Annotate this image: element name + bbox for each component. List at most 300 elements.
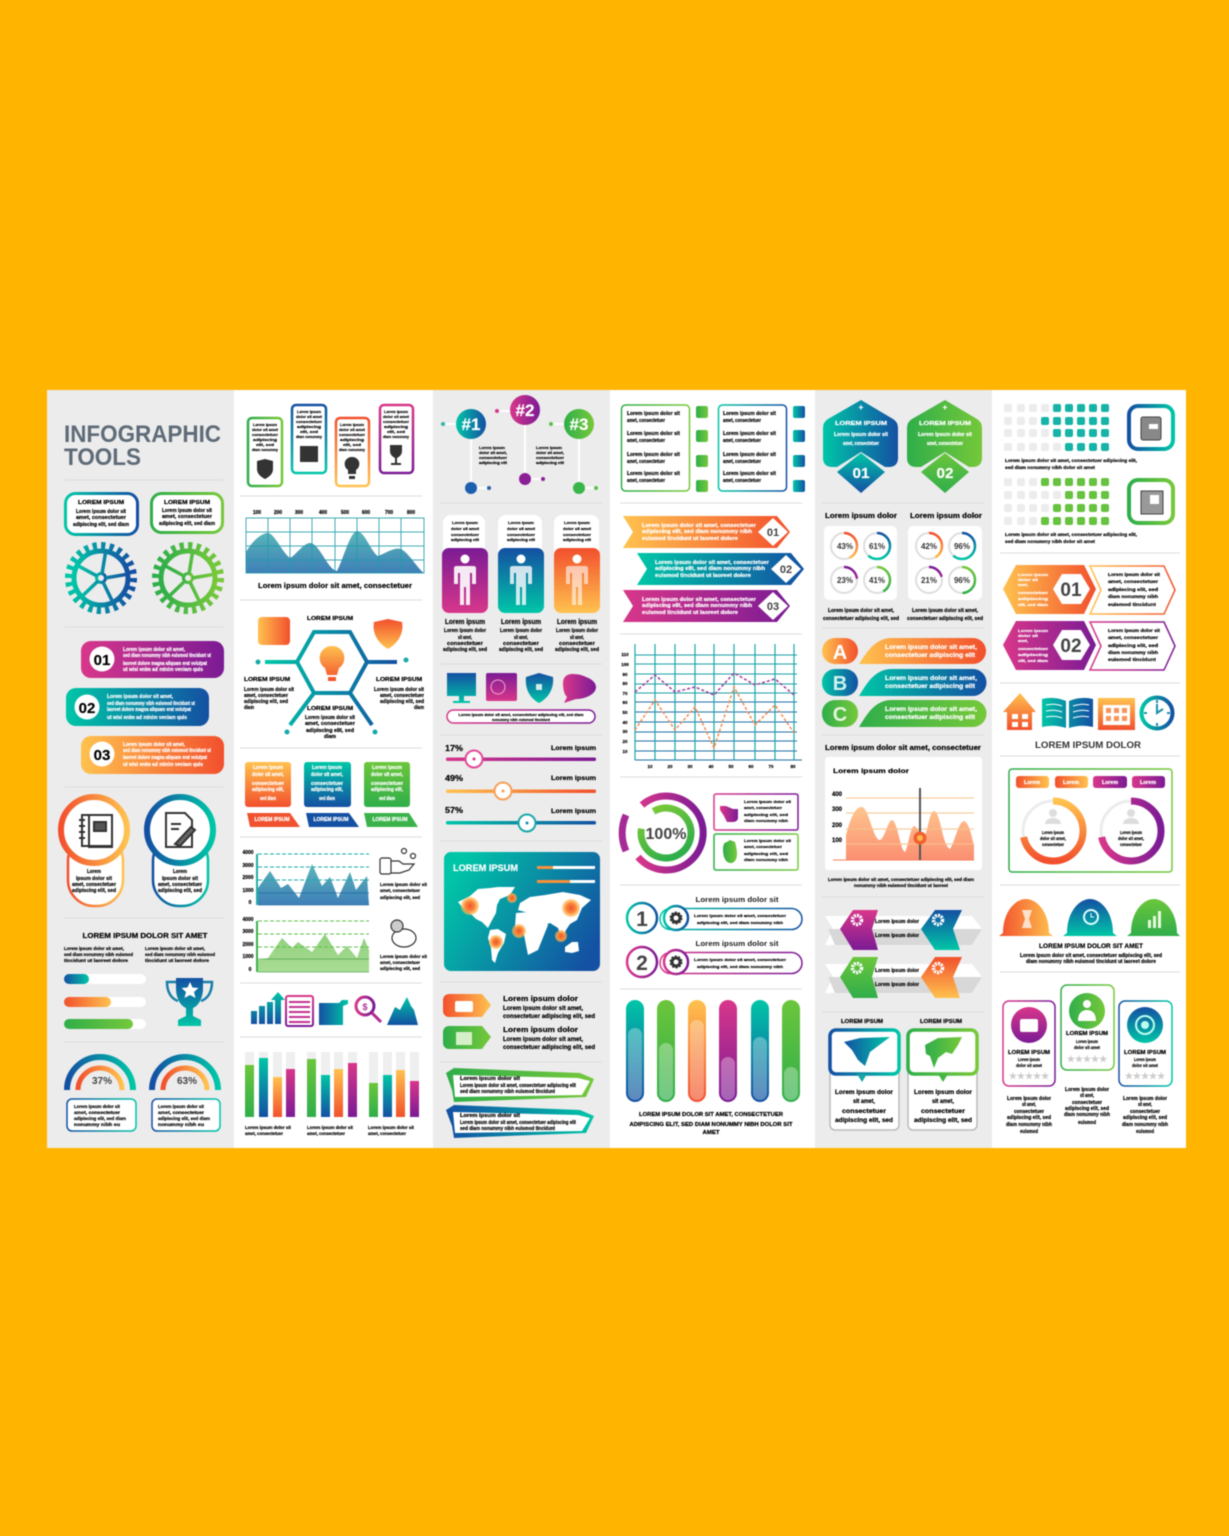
icon row: house, book, calendar, clock (1003, 693, 1172, 750)
blue area chart (242, 850, 369, 906)
dome icons: Lorem ipsum dolor sit amet, consectetuer adipiscing elit, sed (1020, 953, 1162, 959)
note cards (248, 405, 413, 486)
ribbon row two (825, 957, 982, 998)
ranking timeline: #1 (462, 415, 480, 434)
step pill 01: 01 (94, 652, 110, 669)
map pin card: Eurasia (908, 1019, 977, 1130)
tube chart caption: ADIPISCING ELIT, SED DIAM NONUMMY NIBH DOLOR SIT (630, 1122, 792, 1128)
callout boxes with hand icons: diam nonummy nibh (744, 818, 789, 823)
blue area chart: 4000 (242, 850, 254, 856)
profile card blue: dolor sit amet (1132, 1063, 1158, 1068)
hex step 02: amet, (1018, 638, 1028, 643)
profile card purple: LOREM IPSUM (1008, 1050, 1050, 1056)
step pill 01: sed diam nonummy nibh euismod tincidunt ut (123, 653, 211, 659)
hexagon diagram: Lorem ipsum dolor sit (305, 715, 355, 721)
orange area chart card: 200 (832, 823, 843, 829)
sliders: 17% (445, 744, 463, 753)
percent ring cards: Lorem ipsum dolor sit amet, (828, 608, 895, 614)
arrow banner 02: 02 (780, 564, 792, 576)
tube chart caption: LOREM IPSUM DOLOR SIT AMET, CONSECTETUER (639, 1112, 783, 1118)
line chart (621, 644, 802, 769)
icon: trophy (167, 978, 212, 1026)
percent ring cards: 43% (837, 542, 853, 551)
people cards: dolor sit amet (507, 526, 536, 531)
numbered step 1: 1 (636, 908, 648, 931)
hexagon badge 01: LOREM IPSUM (835, 421, 887, 427)
percent ring cards: Lorem ipsum dolor (825, 513, 897, 520)
hexagon diagram: Lorem ipsum dolor sit (374, 687, 424, 693)
ranking timeline: #2 (516, 401, 534, 420)
icon: blue framed window (1129, 406, 1173, 449)
numbered step 1: adipiscing elit, sed diam nonummy nibh (697, 920, 784, 925)
hex step 01: amet, (1018, 582, 1028, 587)
banner: green: Lorem ipsum dolor sit amet, consectetuer adipiscing elit (460, 1083, 576, 1089)
hexagon badge 02: Lorem ipsum dolor sit (918, 432, 972, 438)
numbered step 1: Lorem ipsum dolor sit amet, consectetuer (694, 913, 787, 918)
profile card purple: Lorem ipsum (1018, 1057, 1040, 1062)
profile notes: diam nonummy nibh (1064, 1112, 1110, 1118)
people cards (442, 515, 600, 653)
coloured text cards with tabs: Lorem ipsum (253, 765, 284, 771)
text box: green: Lorem ipsum dolor sit (162, 508, 212, 514)
coloured text cards with tabs: LOREM IPSUM (372, 817, 408, 823)
coloured text cards with tabs: LOREM IPSUM (314, 817, 348, 823)
area chart with grid: 600 (362, 510, 370, 516)
step pill 03 (81, 736, 224, 774)
profile notes: sit amet, (1080, 1093, 1094, 1099)
percent ring cards: 96% (954, 576, 970, 585)
area chart with grid: 500 (341, 510, 349, 516)
chart notes: amet, consectetuer (380, 960, 420, 965)
world map card: LOREM IPSUM (453, 863, 518, 873)
badge: document: adipiscing elit, sed (158, 888, 202, 894)
banner: green: Lorem ipsum dolor sit (460, 1076, 520, 1082)
ribbon row one: Lorem ipsum dolor (875, 933, 919, 939)
gauge caption boxes: amet, consectetuer (74, 1110, 120, 1115)
hexagon diagram: adipiscing elit, sed (306, 728, 354, 734)
heading and intro text: tincidunt ut laoreet dolore (145, 958, 210, 963)
text list: teal: amet, consectetuer (723, 438, 761, 444)
banner: blue: sed diam nonummy nibh euismod tincidunt (460, 1126, 555, 1132)
map pin card: North America: adipiscing elit, sed (835, 1118, 893, 1124)
line chart: 30 (687, 764, 693, 769)
gauge 37%: 37% (92, 1076, 112, 1087)
people cards: Lorem ipsum (564, 520, 590, 525)
chart notes: adipiscing elit, sed (380, 895, 420, 900)
gauge caption boxes: Lorem ipsum dolor sit (74, 1104, 120, 1109)
icon row with caption pill: nonummy nibh euismod tincidunt (492, 717, 551, 722)
donut panel: Lorem (1024, 780, 1041, 786)
people cards: Lorem ipsum (445, 619, 485, 626)
gauge 37% (67, 1057, 133, 1090)
line chart: 110 (621, 652, 629, 657)
hexagon diagram: adipiscing elit, sed (244, 699, 288, 705)
chart notes (380, 882, 427, 971)
gauge 63% (152, 1057, 218, 1090)
note cards: dolor sit amet (252, 427, 279, 432)
hex step 01: euismod tincidunt (1108, 602, 1157, 607)
callout boxes with hand icons: diam nonummy nibh (744, 857, 789, 862)
tag with text: green: consectetuer adipiscing elit, sed (503, 1045, 595, 1051)
profile card green (1061, 985, 1114, 1070)
percent ring cards: 42% (921, 542, 937, 551)
profile card purple: ★★★★★ (1009, 1071, 1050, 1081)
note cards: elit, sed (300, 429, 319, 434)
sliders: 49% (445, 774, 463, 783)
icon: orange safe (258, 617, 290, 645)
hexagon badge 01: Lorem ipsum dolor sit (834, 432, 888, 438)
arrow banner 03: euismod tincidunt ut laoreet dolore (642, 610, 738, 616)
hexagon diagram (244, 616, 424, 740)
note cards: Lorem ipsum (340, 422, 364, 427)
badge: notebook: amet, consectetuer (72, 882, 116, 888)
arrow banner 02 (637, 553, 804, 585)
badge: document: ipsum dolor sit (162, 876, 198, 882)
banner: blue: Lorem ipsum dolor sit (460, 1113, 520, 1119)
arrow banner 01 (623, 516, 790, 548)
line chart: 90 (622, 672, 628, 677)
step pill 03: 03 (94, 747, 110, 764)
profile card green: ★★★★★ (1067, 1054, 1108, 1064)
orange area chart card: 300 (832, 807, 843, 813)
text list: teal: Lorem ipsum dolor sit (723, 471, 776, 477)
note cards: diam nonummy (339, 447, 366, 452)
note cards: consectetuer (296, 419, 322, 424)
hex step 02: consectetuer (1018, 646, 1049, 651)
donut 100%: 100% (646, 826, 686, 843)
line chart: 80 (790, 764, 796, 769)
icon: green framed document (1129, 480, 1173, 523)
hexagon badge 02: + (943, 403, 948, 412)
coloured text cards with tabs: adipiscing elit, (311, 787, 344, 793)
numbered step 1: Lorem ipsum dolor sit (696, 895, 779, 904)
icon: person placeholder right (1123, 809, 1139, 824)
line chart: 50 (622, 710, 628, 715)
line chart: 20 (667, 764, 673, 769)
people cards: sit amet, (570, 635, 584, 641)
dot matrix two: Lorem ipsum dolor sit amet, consectetuer adipiscing elit, (1005, 532, 1137, 537)
option B: B (833, 673, 847, 695)
arrow banner 03: adipiscing elit, sed diam nonummy nibh (642, 603, 752, 609)
numbered step 2: Lorem ipsum dolor sit amet, consectetuer (694, 957, 787, 962)
hex step 01 (1003, 565, 1175, 614)
gauge caption boxes: nonummy nibh eu (158, 1122, 204, 1127)
gauge caption boxes (67, 1099, 220, 1131)
world map card (444, 852, 600, 971)
panel: column one (61, 421, 224, 1131)
badge: notebook: ipsum dolor sit (76, 876, 112, 882)
hexagon diagram: LOREM IPSUM (376, 677, 422, 683)
note cards: adipiscing (253, 437, 278, 442)
heading and intro text: LOREM IPSUM DOLOR SIT AMET (82, 933, 208, 940)
people cards: Lorem ipsum dolor (500, 628, 542, 634)
people cards: dolor sit amet (451, 526, 480, 531)
step pill 03: Lorem ipsum dolor sit amet, (123, 742, 186, 748)
badge: notebook (61, 797, 127, 906)
dot matrix two: sed diam nonummy nibh dolor sit amet (1005, 539, 1096, 544)
option C: C (833, 704, 847, 726)
text box: blue: Lorem ipsum dolor sit (76, 509, 126, 515)
option B: consectetuer adipiscing elit (885, 684, 975, 690)
dot matrix two (1004, 478, 1137, 544)
text box: blue (66, 494, 138, 534)
step pill 01: Lorem ipsum dolor sit amet, (123, 647, 186, 653)
gauge caption boxes: nonummy nibh eu (74, 1122, 120, 1127)
icon: person placeholder left (1045, 809, 1061, 824)
hexagon badge 01 (823, 400, 898, 493)
percent ring cards: 96% (954, 542, 970, 551)
text box: green: adipiscing elit, sed diam (159, 521, 216, 527)
orange area chart card: Lorem ipsum dolor sit amet, consectetuer adipiscing elit, sed diam (828, 877, 974, 882)
donut panel: dolor sit amet, (1118, 836, 1144, 841)
hex step 01: Lorem ipsum (1018, 572, 1049, 577)
map pin card: Eurasia: sit amet, (932, 1099, 954, 1105)
area chart with grid: 300 (295, 510, 303, 516)
sliders: Lorem ipsum (551, 776, 596, 782)
coloured text cards with tabs: sed diam (319, 796, 335, 802)
text box: green: LOREM IPSUM (164, 500, 210, 506)
coloured text cards with tabs: dolor sit amet, (311, 772, 344, 778)
icon: bulb (345, 457, 359, 479)
icon: pointing hand (720, 806, 738, 822)
numbered step 2: 2 (636, 952, 648, 975)
people cards: sit amet, (514, 635, 528, 641)
text list: green: Lorem ipsum dolor sit (627, 431, 680, 437)
line chart: 80 (622, 681, 628, 686)
hexagon badge 02 (907, 400, 982, 493)
line chart: 40 (622, 720, 628, 725)
note cards: dolor sit amet (296, 414, 323, 419)
note cards: diam nonummy (252, 447, 279, 452)
callout boxes with hand icons: Lorem ipsum dolor sit (744, 838, 792, 843)
people cards: adipiscing elit, sed (499, 647, 543, 653)
heading and intro text: Lorem ipsum dolor sit amet, (64, 946, 124, 951)
callout boxes with hand icons: adipiscing elit, sed (744, 851, 789, 856)
percent ring cards: consectetuer adipiscing elit, sed (823, 616, 899, 622)
chart notes: Lorem ipsum dolor sit (380, 882, 427, 887)
profile notes: diam nonummy nibh (1006, 1122, 1052, 1128)
percent ring cards: Lorem ipsum dolor (910, 513, 982, 520)
hexagon diagram: amet, consectetuer (305, 721, 355, 727)
option A (822, 638, 986, 664)
note cards: consectetuer (339, 432, 365, 437)
donut panel: Lorem (1102, 780, 1119, 786)
profile notes: Lorem ipsum dolor (1123, 1096, 1167, 1102)
hex step 02: euismod tincidunt (1108, 657, 1157, 662)
people cards: adipiscing elit, sed (555, 647, 599, 653)
heading and intro text: Lorem ipsum dolor sit amet, (145, 946, 205, 951)
blue area chart: 1000 (242, 888, 254, 894)
icon row with caption pill (447, 673, 596, 723)
orange area chart card: nonummy nibh euismod tincidunt ut laoreet (854, 883, 948, 888)
hex step 02: Lorem ipsum (1018, 628, 1049, 633)
hex step 02: 02 (1060, 636, 1082, 657)
people cards: Lorem ipsum (501, 619, 541, 626)
step pill 01: ut wisi enim ad minim veniam quis (123, 667, 203, 673)
dot matrix one (1004, 404, 1137, 470)
coloured text cards with tabs: sed diam (379, 796, 395, 802)
blue area chart: 3000 (242, 863, 254, 869)
note cards: dolor sit amet (383, 414, 410, 419)
coloured text cards with tabs: dolor sit amet, (371, 772, 404, 778)
donut panel: Lorem ipsum (1120, 830, 1142, 835)
text list: teal: Lorem ipsum dolor sit (723, 411, 776, 417)
donut panel: dolor sit amet, (1040, 836, 1066, 841)
ribbon row one: Lorem ipsum dolor (875, 919, 919, 925)
tag with text: orange: Lorem ipsum dolor (503, 994, 578, 1003)
hexagon diagram: adipiscing elit, sed (380, 699, 424, 705)
text list: green (622, 405, 708, 492)
map pin card: North America (830, 1019, 899, 1130)
people cards: consectetuer (503, 641, 539, 647)
text list: teal: Lorem ipsum dolor sit (723, 431, 776, 437)
icon row with caption pill: Lorem ipsum dolor sit amet, consectetuer adipiscing elit, sed diam (458, 712, 584, 717)
icon: person 2 (510, 554, 532, 605)
profile notes: adipiscing elit, sed (1123, 1115, 1167, 1121)
panel: column five (822, 400, 986, 1130)
ranking timeline: dolor sit amet, (479, 450, 507, 455)
map pin card: North America: Lorem ipsum dolor (835, 1090, 894, 1096)
ribbon row two: Lorem ipsum dolor (875, 968, 919, 974)
gauge 63%: 63% (177, 1076, 197, 1087)
step pill 03: ut wisi enim ad minim veniam quis (123, 762, 203, 768)
percent ring cards: 41% (869, 576, 885, 585)
area chart with grid: 100 (253, 510, 261, 516)
gauge caption boxes: adipiscing elit, sed diam (158, 1116, 210, 1121)
step pill 03: sed diam nonummy nibh euismod tincidunt ut (123, 748, 211, 754)
map pin card: North America: sit amet, (853, 1099, 875, 1105)
step pill 02 (66, 688, 209, 726)
line chart: 100 (621, 662, 629, 667)
icon: person 3 (566, 554, 588, 605)
map pin card: Eurasia: Lorem ipsum dolor (914, 1090, 973, 1096)
coloured text cards with tabs: Lorem ipsum (372, 765, 403, 771)
map pin card: North America: consectetuer (842, 1109, 887, 1115)
profile card purple: dolor sit amet (1016, 1063, 1042, 1068)
callout boxes with hand icons: Lorem ipsum dolor sit (744, 799, 792, 804)
numbered step 1 (627, 895, 802, 933)
blue area chart: 2000 (242, 875, 254, 881)
orange area chart card: 100 (832, 838, 843, 844)
line chart: 30 (622, 729, 628, 734)
callout boxes with hand icons: amet, consectetuer (744, 844, 782, 849)
ranking timeline: Lorem ipsum (479, 445, 505, 450)
panel: column two (242, 405, 427, 1136)
icon: trophy small (390, 445, 402, 465)
arrow banner 01: 01 (767, 527, 779, 539)
text list: teal: Lorem ipsum dolor sit (723, 452, 776, 458)
area chart with grid: 800 (407, 510, 415, 516)
option C: consectetuer adipiscing elit (885, 715, 975, 721)
line chart: 50 (728, 764, 734, 769)
percent ring cards: Lorem ipsum dolor sit amet, (912, 608, 979, 614)
orange area chart card (825, 745, 982, 888)
map pin card: Eurasia: LOREM IPSUM (920, 1019, 962, 1025)
text box: blue: amet, consectetuer (76, 515, 126, 521)
profile notes: euismod (1136, 1129, 1154, 1135)
green area chart: 0 (249, 967, 252, 973)
people cards: Lorem ipsum (557, 619, 597, 626)
callout boxes with hand icons: amet, consectetuer (744, 805, 782, 810)
hex step 02: elit, sed diam (1018, 658, 1049, 663)
chart notes: Lorem ipsum dolor sit (380, 954, 427, 959)
option B: Lorem ipsum dolor sit amet, (885, 676, 977, 682)
text list: green: amet, consectetuer (627, 478, 665, 484)
note cards: elit, sed (343, 442, 362, 447)
map pin card: North America: LOREM IPSUM (841, 1019, 883, 1025)
callout boxes with hand icons (714, 794, 798, 870)
profile notes (1006, 1087, 1168, 1135)
people cards: adipiscing elit, sed (443, 647, 487, 653)
profile notes: adipiscing elit, sed (1007, 1115, 1051, 1121)
hex step 01: elit, sed diam (1018, 602, 1049, 607)
line chart: 40 (708, 764, 714, 769)
people cards: Lorem ipsum dolor (556, 628, 598, 634)
numbered step 2: Lorem ipsum dolor sit (696, 939, 779, 948)
percent ring cards: 23% (837, 576, 853, 585)
hex step 01: amet, consectetuer (1108, 579, 1158, 584)
icon row: $ (362, 1002, 368, 1012)
coloured text cards with tabs (245, 762, 418, 827)
option A: consectetuer adipiscing elit (885, 653, 975, 659)
ranking timeline: consectetuer (536, 455, 564, 460)
map pin card: Eurasia: consectetuer (921, 1109, 966, 1115)
banner: blue (446, 1105, 594, 1138)
arrow banner 03: 03 (767, 601, 779, 613)
people cards: adipiscing elit (451, 537, 480, 542)
step pill 02: ut wisi enim ad minim veniam quis (107, 715, 187, 721)
tag with text: orange: Lorem ipsum dolor sit amet, (503, 1006, 583, 1012)
icon: document and pen (166, 813, 195, 847)
ranking timeline (441, 395, 598, 494)
arrow banner 03 (623, 590, 790, 622)
icon: light bulb (320, 646, 344, 681)
people cards: Lorem ipsum dolor (444, 628, 486, 634)
hex step 01: 01 (1060, 580, 1082, 601)
profile card purple (1003, 1001, 1055, 1086)
note cards: consectetuer (383, 419, 409, 424)
ribbon row one (825, 910, 982, 950)
option C (822, 700, 986, 727)
hex step 02: adipiscing (1018, 652, 1049, 657)
percent ring cards (823, 513, 983, 622)
profile notes: consectetuer (1014, 1109, 1044, 1115)
grouped bar chart: amet, consectetuer (368, 1131, 406, 1136)
line chart: 60 (748, 764, 754, 769)
profile notes: sit amet, (1138, 1102, 1152, 1108)
hexagon badge 01: 01 (852, 465, 870, 482)
option A: A (833, 642, 847, 664)
people cards: Lorem ipsum (508, 520, 534, 525)
area chart with grid: 700 (385, 510, 393, 516)
gauge caption boxes: amet, consectetuer (158, 1110, 204, 1115)
badge: document: amet, consectetuer (158, 882, 202, 888)
note cards: dolor sit amet (339, 427, 366, 432)
tube chart caption: AMET (702, 1130, 720, 1136)
orange area chart card: Lorem ipsum dolor (833, 768, 910, 775)
donut panel: consectetuer (1042, 842, 1064, 847)
profile notes: euismod (1020, 1129, 1038, 1135)
line chart: 60 (622, 700, 628, 705)
banner: green: sed diam nonummy nibh euismod tincidunt (460, 1089, 555, 1095)
profile card green: dolor sit amet (1074, 1045, 1100, 1050)
ranking timeline: consectetuer (479, 455, 507, 460)
sheet background (47, 390, 1186, 1148)
line chart: 10 (647, 764, 653, 769)
heading and intro text: tincidunt ut laoreet dolore (64, 958, 129, 963)
note cards: Lorem ipsum (253, 422, 277, 427)
map pin card: Eurasia: adipiscing elit, sed (914, 1118, 972, 1124)
